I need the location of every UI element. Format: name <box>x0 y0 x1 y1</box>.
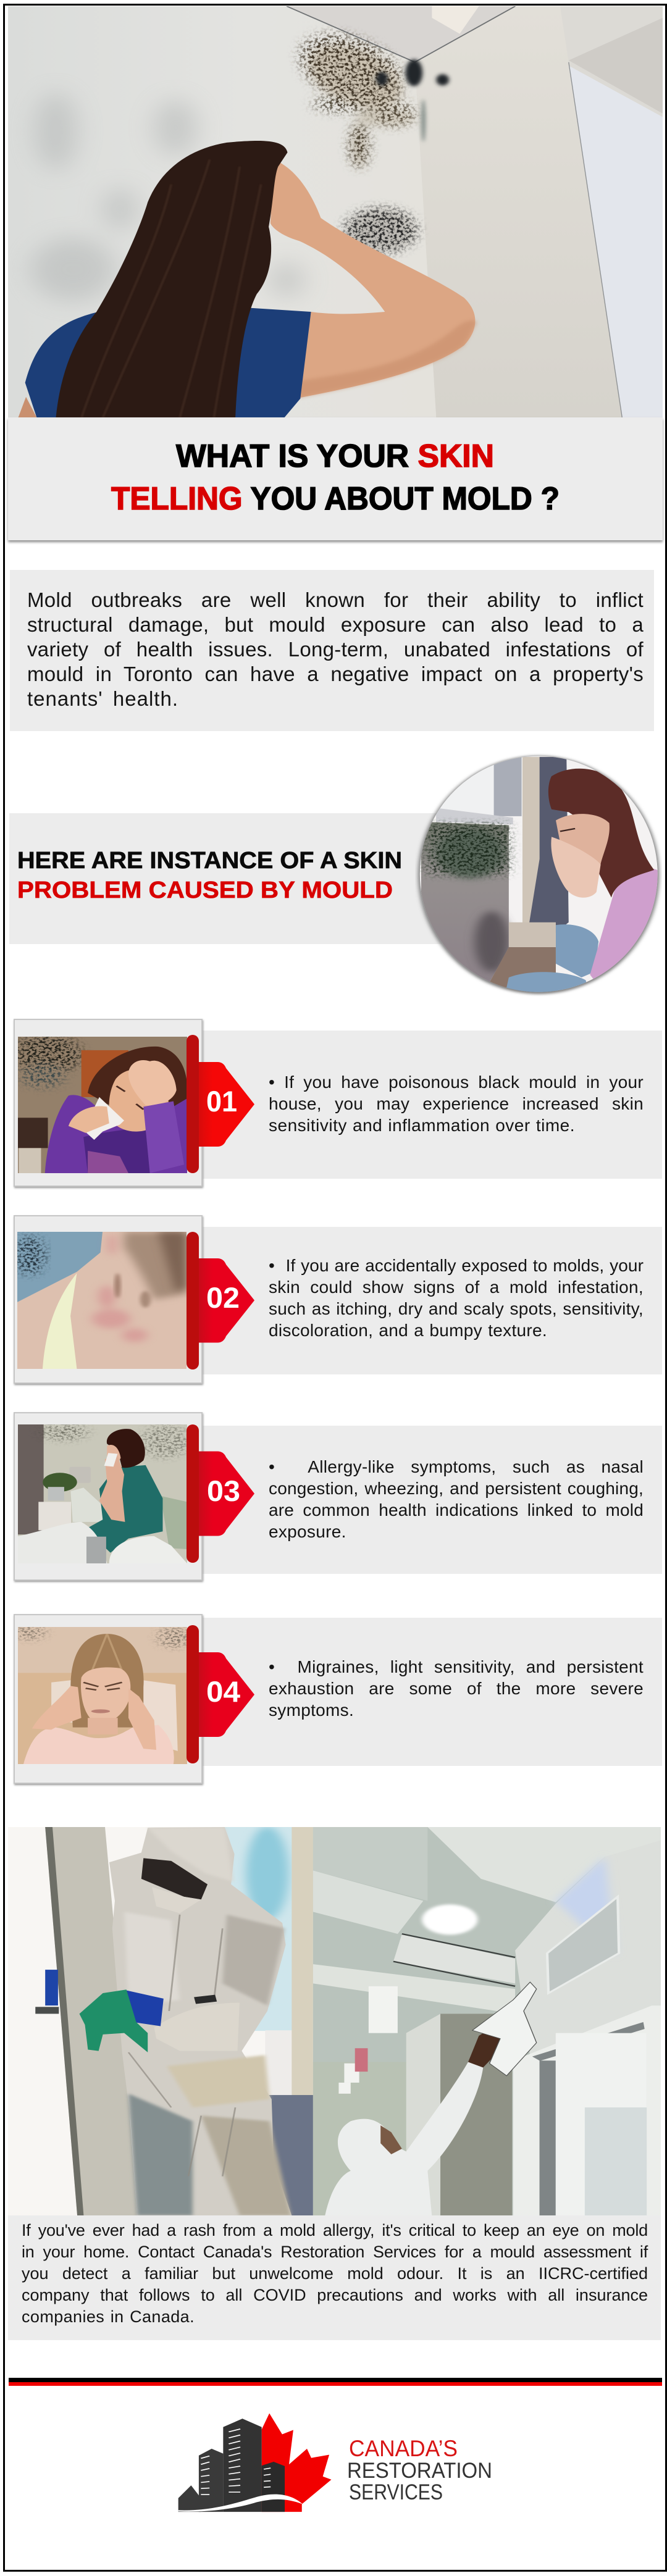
title <box>111 438 560 517</box>
item 04 panel <box>202 1618 662 1766</box>
logo wordmark: RESTORATION <box>347 2459 492 2483</box>
item 02 number badge <box>199 1258 254 1342</box>
item 03 number badge <box>199 1451 254 1536</box>
intro paragraph: variety of health issues. Long-term, unabated infestations of <box>27 638 644 661</box>
ceiling light <box>422 1904 477 1934</box>
item 02 text: • If you are accidentally exposed to molds, your <box>269 1256 644 1275</box>
title panel <box>8 417 663 540</box>
item 01 red bar <box>187 1035 199 1173</box>
item 03 red bar <box>187 1424 199 1563</box>
item 03 text: congestion, wheezing, and persistent coughing, <box>269 1479 644 1498</box>
item 04 red bar <box>187 1625 199 1763</box>
item 01 number badge: 01 <box>206 1085 237 1118</box>
woman figure <box>505 769 661 997</box>
blue t-shirt <box>25 307 311 417</box>
mould patches on wall <box>284 19 449 253</box>
logo wordmark: SERVICES <box>349 2480 443 2504</box>
intro panel <box>10 570 654 731</box>
item 03 photo: woman in bed blowing nose <box>18 1424 187 1563</box>
section heading <box>17 848 402 903</box>
item 04 text: • Migraines, light sensitivity, and persistent <box>269 1657 644 1676</box>
closing paragraph: companies in Canada. <box>22 2307 195 2326</box>
photo: technicians in protective suits disinfecting <box>8 1827 661 2215</box>
item 01 text <box>269 1073 644 1135</box>
item 01 text: house, you may experience increased skin <box>269 1094 644 1113</box>
item 03 text: exposure. <box>269 1522 346 1541</box>
title: WHAT IS YOUR SKIN <box>176 438 494 474</box>
hand holding sprayer <box>468 1982 537 2076</box>
section heading: HERE ARE INSTANCE OF A SKIN <box>17 848 402 874</box>
woman's arm and hand <box>271 159 475 399</box>
item 02 photo frame <box>14 1215 203 1384</box>
item 02 text: skin could show signs of a mold infestation, <box>269 1278 644 1297</box>
blue glove and green cloth <box>80 1989 164 2052</box>
intro paragraph: mould in Toronto can have a negative impact on a property's <box>27 663 644 685</box>
intro paragraph <box>27 588 644 710</box>
item 02 text: discoloration, and a bumpy texture. <box>269 1321 547 1340</box>
item 04 photo frame <box>14 1614 203 1784</box>
item 02 red bar <box>187 1232 199 1370</box>
item 01 text: sensitivity and inflammation over time. <box>269 1116 575 1135</box>
item 04 photo: woman with migraine <box>18 1627 187 1764</box>
item 03 text: • Allergy-like symptoms, such as nasal <box>269 1457 644 1476</box>
item 03 photo frame <box>14 1412 203 1581</box>
protective suit, right technician <box>325 2062 483 2215</box>
protective suit, left technician <box>109 1827 292 2215</box>
intro paragraph: tenants' health. <box>27 687 178 710</box>
item 03 text <box>269 1457 644 1541</box>
long dark hair <box>56 141 288 417</box>
item 01 panel <box>202 1031 662 1179</box>
item 01 text: • If you have poisonous black mould in your <box>269 1073 644 1092</box>
company logo <box>178 2413 492 2512</box>
hero photo: woman looking at mouldy wall <box>8 6 663 417</box>
item 04 text: symptoms. <box>269 1700 354 1720</box>
item 02 panel <box>202 1227 662 1374</box>
item 02 photo: skin rash on chest <box>17 1232 187 1369</box>
section heading panel <box>9 813 442 944</box>
item 03 text: are common health indications linked to mold <box>269 1500 644 1520</box>
section heading: PROBLEM CAUSED BY MOULD <box>17 877 393 903</box>
circular photo: woman covering her face beside mouldy wall <box>415 754 662 996</box>
closing paragraph <box>22 2221 648 2326</box>
item 02 text: such as itching, dry and scaly spots, sensitivity, <box>269 1299 644 1318</box>
closing paragraph: company that follows to all COVID precautions and works with all insurance <box>22 2286 648 2304</box>
door and frame <box>513 2005 661 2215</box>
item 04 text: exhaustion are some of the more severe <box>269 1679 644 1698</box>
pendant lamps <box>338 1986 398 2094</box>
wall vent <box>547 1897 619 1993</box>
item 04 number badge: 04 <box>206 1675 240 1708</box>
item 04 number badge <box>199 1652 254 1737</box>
item 03 number badge: 03 <box>207 1474 240 1507</box>
closing paragraph: you detect a familiar but unwelcome mold odour. It is an IICRC-certified <box>22 2264 648 2283</box>
intro paragraph: structural damage, but mould exposure can also lead to a <box>27 613 644 636</box>
item 02 number badge: 02 <box>206 1281 240 1314</box>
intro paragraph: Mold outbreaks are well known for their ability to inflict <box>27 588 644 611</box>
item 01 photo frame <box>14 1019 203 1187</box>
logo wordmark: CANADA’S <box>349 2436 458 2461</box>
closing paragraph: in your home. Contact Canada's Restoration Services for a mould assessment if <box>22 2243 648 2261</box>
item 03 panel <box>202 1426 662 1574</box>
item 02 text <box>269 1256 644 1340</box>
icon: maple leaf and buildings <box>178 2414 332 2512</box>
closing panel <box>8 2215 661 2340</box>
item 01 number badge <box>199 1062 254 1147</box>
black and red divider <box>9 2378 662 2386</box>
item 04 text <box>269 1657 644 1720</box>
closing paragraph: If you've ever had a rash from a mold allergy, it's critical to keep an eye on mold <box>22 2221 648 2239</box>
item 01 photo: woman sneezing with tissue <box>18 1037 187 1173</box>
logo wordmark <box>347 2436 492 2504</box>
title: TELLING YOU ABOUT MOLD ? <box>111 481 560 517</box>
